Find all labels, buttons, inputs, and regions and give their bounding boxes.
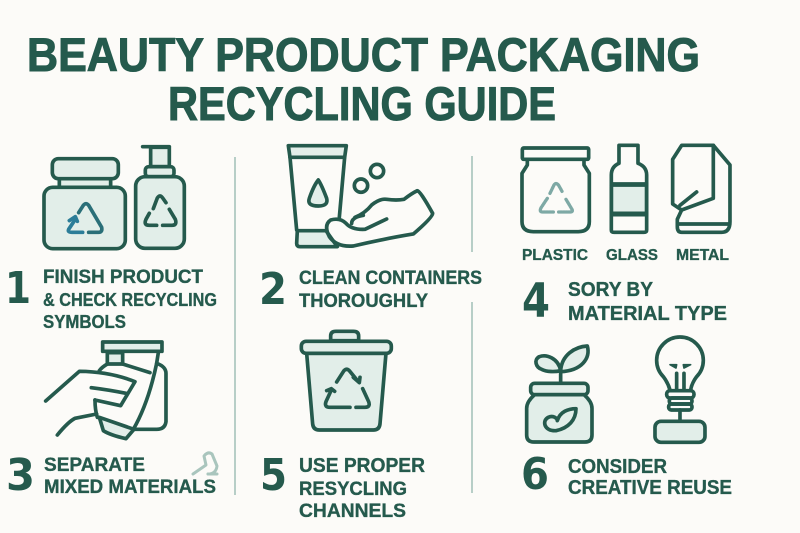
icon: faint bird mark	[193, 453, 217, 474]
icon: jar with sprout	[527, 346, 592, 442]
step number 2: 2	[259, 264, 287, 315]
icon: glass bottle	[611, 145, 647, 232]
icon: recycling bin	[301, 331, 391, 430]
icon: hand separating pump from jar	[46, 342, 166, 439]
step 3 text: MIXED MATERIALS	[44, 476, 216, 498]
panel: step 6	[521, 337, 732, 500]
step 1 text: SYMBOLS	[43, 311, 126, 332]
material labels: PLASTIC	[522, 247, 588, 264]
step number 6: 6	[521, 449, 549, 500]
step 1 text: & CHECK RECYCLING	[43, 289, 217, 310]
step 2 text: CLEAN CONTAINERS	[299, 267, 482, 289]
step 5 text: USE PROPER	[299, 455, 426, 477]
step 6 text	[568, 456, 732, 499]
step 5 text	[299, 455, 426, 522]
title: RECYCLING GUIDE	[168, 77, 556, 130]
material labels: GLASS	[606, 247, 658, 264]
icon: tube and washing hand	[288, 146, 433, 247]
panel: step 1	[5, 147, 217, 332]
material labels	[522, 247, 729, 264]
panel: step 5	[260, 331, 426, 522]
panel: step 3	[6, 342, 217, 501]
step 4 text: MATERIAL TYPE	[568, 303, 727, 325]
step number 1: 1	[5, 263, 31, 314]
step 4 text: SORY BY	[568, 279, 654, 301]
title	[27, 28, 700, 130]
step 5 text: RESYCLING	[299, 478, 407, 500]
step number 5: 5	[260, 450, 287, 501]
step 3 text: SEPARATE	[44, 454, 145, 476]
icon: jar and pump bottle with recycling symbols	[44, 147, 184, 249]
icon: plastic jar	[522, 148, 589, 232]
step number 3: 3	[6, 450, 35, 501]
icon: light bulb on base	[655, 337, 705, 442]
step 1 text: FINISH PRODUCT	[43, 266, 203, 288]
step 2 text: THOROUGHLY	[299, 291, 428, 312]
step 4 text	[568, 279, 727, 325]
title: BEAUTY PRODUCT PACKAGING	[27, 28, 700, 81]
panel: step 4	[522, 145, 730, 329]
step number 4: 4	[522, 274, 550, 329]
step 5 text: CHANNELS	[299, 500, 406, 522]
step 2 text	[299, 267, 482, 312]
icon: crushed metal can	[673, 145, 730, 232]
material labels: METAL	[676, 247, 729, 264]
step 3 text	[44, 454, 216, 498]
step 6 text: CONSIDER	[568, 456, 668, 478]
step 1 text	[43, 266, 217, 332]
step 6 text: CREATIVE REUSE	[568, 477, 732, 499]
panel: step 2	[259, 146, 482, 315]
